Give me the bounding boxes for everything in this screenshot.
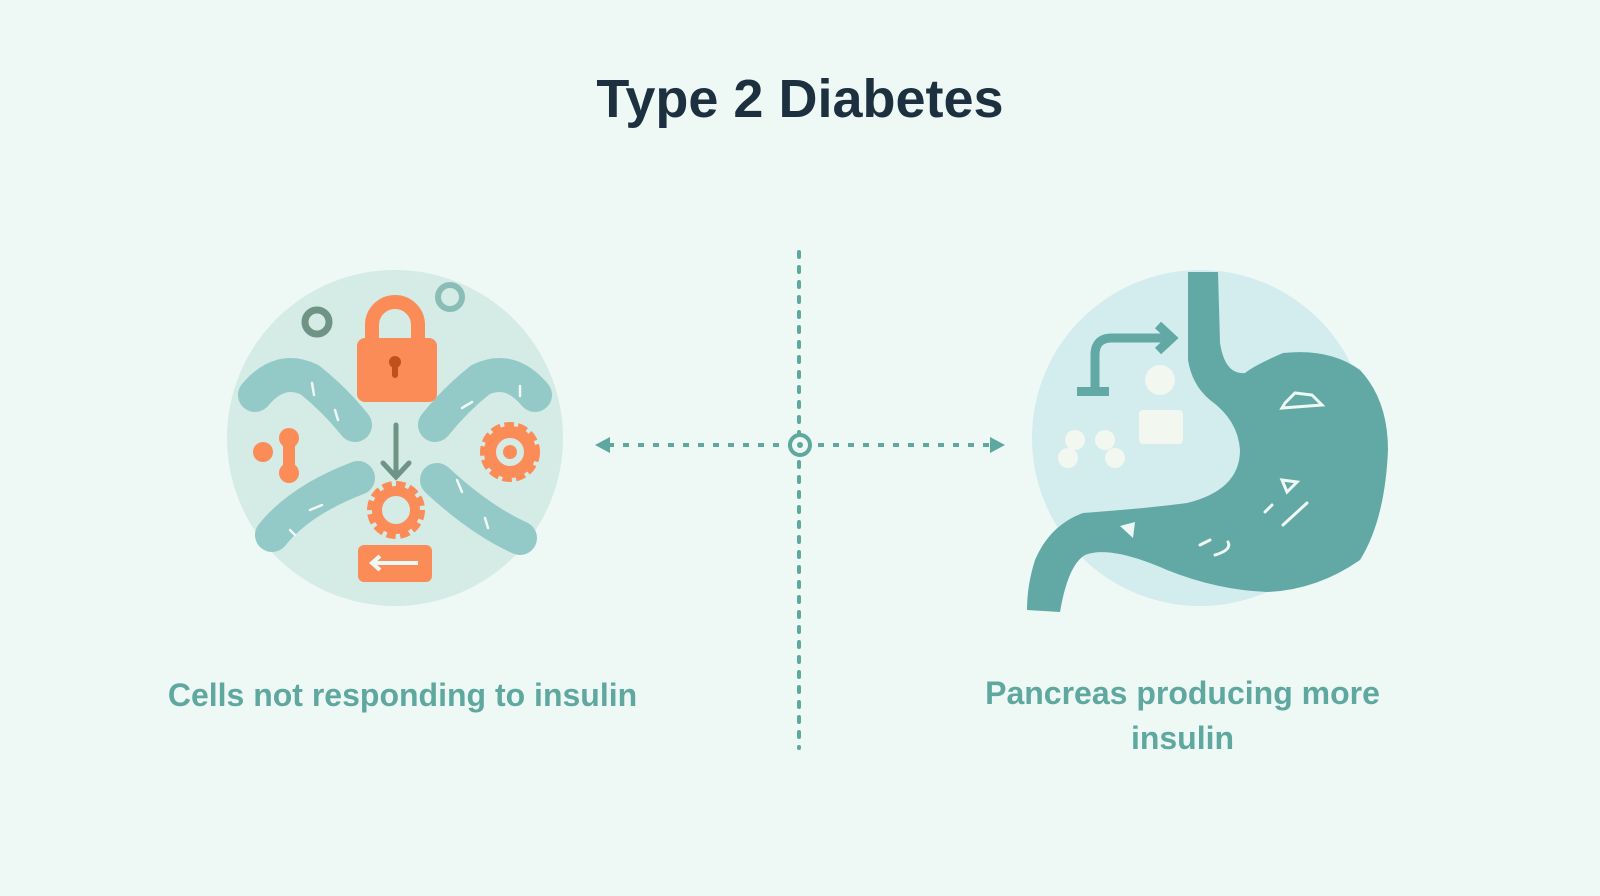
divider: vertical dotted line <box>797 252 801 748</box>
label: left: Cells not responding to insulin <box>168 677 637 713</box>
arrow: horizontal double arrow <box>595 435 1005 455</box>
icon: molecule <box>253 428 299 483</box>
icon: padlock <box>357 302 437 402</box>
label: right: Pancreas producing more insulin <box>985 675 1380 756</box>
icon: gears <box>305 285 533 532</box>
title: Type 2 Diabetes <box>596 69 1004 129</box>
icon: swap box <box>358 545 432 582</box>
icon: stomach circle <box>1027 270 1388 612</box>
icon: cells circle <box>227 270 563 606</box>
arrow down <box>383 425 409 477</box>
